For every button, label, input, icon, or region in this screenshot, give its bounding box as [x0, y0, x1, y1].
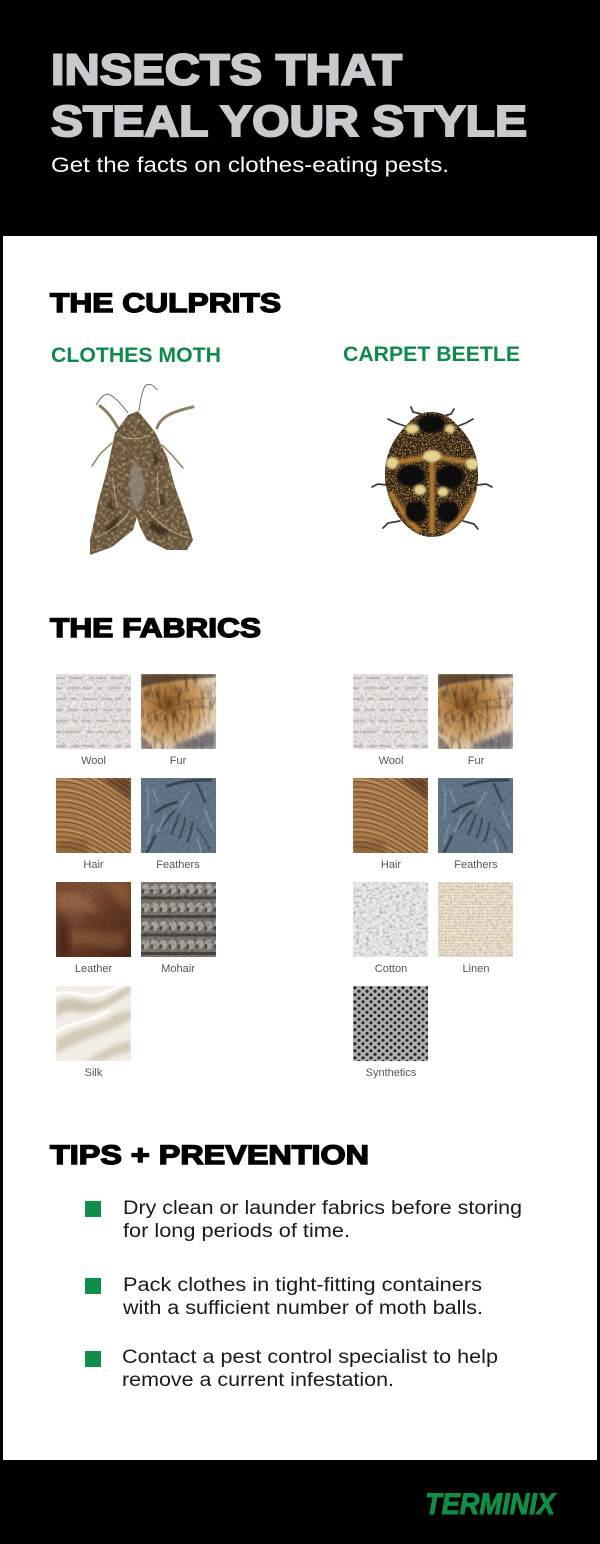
fabrics: carpet beetle column: [348, 674, 513, 1079]
fabrics: clothes moth column: [51, 674, 216, 1079]
swatch: wool: [56, 674, 131, 767]
swatch: cotton: Cotton: [375, 963, 407, 975]
swatch: silk: [56, 986, 131, 1079]
swatch: leather: Leather: [75, 963, 112, 975]
white content panel: [3, 236, 597, 1460]
subtitle: Get the facts on clothes-eating pests.: [51, 154, 449, 177]
heading: the fabrics: THE FABRICS: [50, 613, 261, 643]
swatch: wool: Wool: [379, 755, 403, 767]
swatch: synthetics: [353, 986, 428, 1079]
illustration: clothes moth: [90, 384, 193, 555]
label: carpet beetle: CARPET BEETLE: [343, 343, 520, 366]
title: [51, 46, 527, 146]
tip 2: [85, 1275, 483, 1319]
swatch: linen: [438, 882, 513, 975]
swatch: synthetics: Synthetics: [366, 1067, 417, 1079]
header: [51, 46, 527, 177]
tip 1: [85, 1198, 522, 1242]
swatch: fur: [438, 674, 513, 767]
swatch: wool: Wool: [81, 755, 106, 767]
swatch: feathers: [438, 778, 513, 871]
swatch: mohair: [141, 882, 216, 975]
swatch: leather: [56, 882, 131, 975]
tip 3: [85, 1347, 498, 1391]
swatch: hair: [51, 747, 136, 883]
swatch: cotton: [353, 882, 428, 975]
logo: terminix: TERMINIX: [425, 1488, 557, 1521]
swatch: fur: [141, 674, 216, 767]
label: clothes moth: CLOTHES MOTH: [51, 344, 221, 367]
swatch: fur: Fur: [170, 755, 187, 767]
heading: the culprits: THE CULPRITS: [50, 288, 281, 318]
tip 1: for long periods of time.: [123, 1221, 350, 1242]
swatch: linen: Linen: [463, 963, 489, 975]
swatch: mohair: Mohair: [161, 963, 195, 975]
swatch: silk: Silk: [85, 1067, 103, 1079]
swatch: hair: Hair: [83, 859, 104, 871]
tip 2: Pack clothes in tight-fitting containers: [123, 1275, 482, 1296]
title: INSECTS THAT: [51, 46, 402, 94]
swatch: hair: [348, 747, 433, 883]
tip 3: Contact a pest control specialist to help: [122, 1347, 498, 1368]
swatch: wool: [353, 674, 428, 767]
title: STEAL YOUR STYLE: [51, 97, 527, 146]
heading: tips + prevention: TIPS + PREVENTION: [50, 1140, 369, 1170]
tip 1: Dry clean or launder fabrics before storing: [123, 1198, 522, 1219]
tip 2: with a sufficient number of moth balls.: [122, 1298, 483, 1319]
swatch: feathers: [141, 778, 216, 871]
illustration: carpet beetle: [372, 407, 492, 537]
swatch: fur: Fur: [468, 755, 485, 767]
swatch: feathers: Feathers: [156, 859, 200, 871]
tip 3: remove a current infestation.: [122, 1370, 394, 1391]
swatch: feathers: Feathers: [454, 859, 498, 871]
swatch: hair: Hair: [381, 859, 401, 871]
